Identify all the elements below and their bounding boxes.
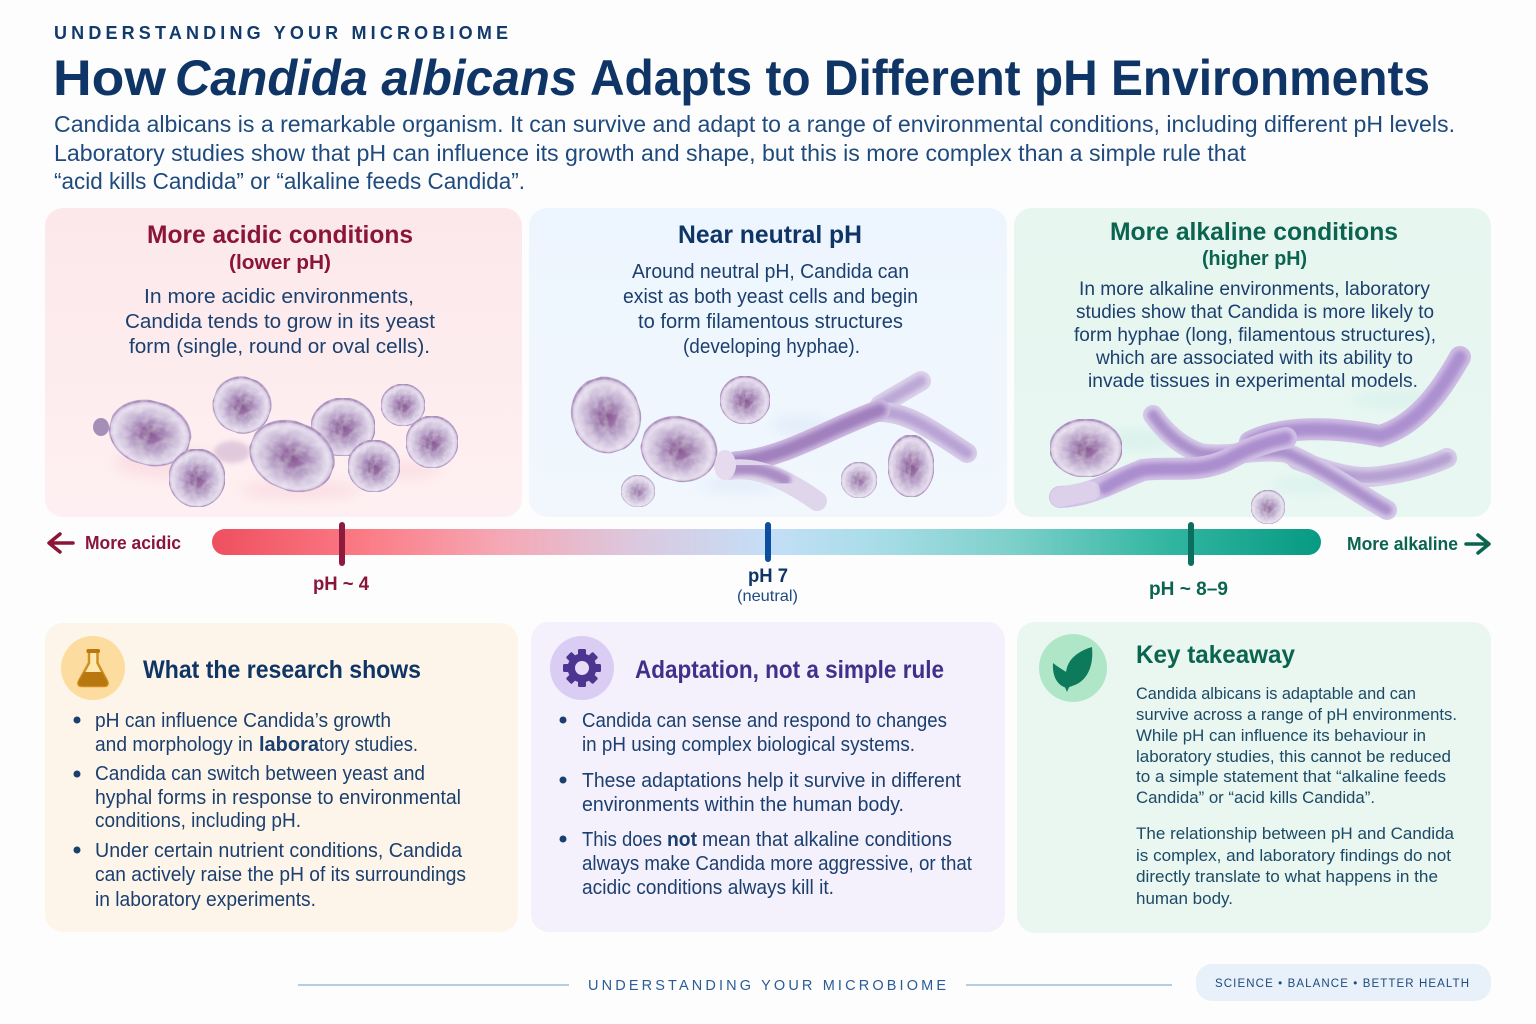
tick: pH 8-9 (1188, 522, 1194, 566)
bullet list: in laboratory experiments. (95, 889, 316, 911)
takeaway paragraphs: directly translate to what happens in the (1136, 867, 1438, 886)
panel background (531, 622, 1005, 932)
bullet list: and morphology in (95, 734, 253, 756)
bullet list: labora (259, 734, 320, 756)
panel subheading: (lower pH) (229, 252, 331, 274)
bullet list: always make Candida more aggressive, or that (582, 853, 972, 875)
panel background (45, 623, 518, 932)
arrow: more alkaline (1466, 535, 1489, 553)
title: How (53, 50, 166, 106)
heading: What the research shows (143, 656, 421, 684)
heading: Adaptation, not a simple rule (635, 656, 944, 684)
gradient bar (212, 529, 1321, 555)
panel body text: (developing hyphae). (683, 336, 860, 358)
label: neutral: (neutral) (737, 588, 798, 605)
illustration: yeast cells (93, 369, 458, 507)
label: pH 7: pH 7 (748, 566, 788, 587)
panel body text: Around neutral pH, Candida can (632, 261, 909, 283)
panel background (1014, 208, 1491, 517)
panel body text: In more acidic environments, (144, 286, 414, 308)
takeaway paragraphs: While pH can influence its behaviour in (1136, 726, 1426, 745)
panel: key takeaway (1017, 622, 1491, 933)
footer (298, 964, 1491, 1001)
takeaway paragraphs (1136, 684, 1457, 908)
label: more alkaline: More alkaline (1347, 534, 1458, 554)
intro paragraph: Candida albicans is a remarkable organism. It can survive and adapt to a range of environmental conditions, including different pH levels. (54, 111, 1455, 137)
icon: flask (61, 636, 125, 700)
intro paragraph: “acid kills Candida” or “alkaline feeds Candida”. (54, 168, 525, 194)
illustration: hyphae (1050, 357, 1460, 524)
panel heading: Near neutral pH (678, 221, 862, 249)
panel background (1017, 622, 1491, 933)
panel body text: studies show that Candida is more likely to (1076, 301, 1434, 323)
bullet list: Candida can switch between yeast and (95, 763, 425, 785)
label: more acidic: More acidic (85, 533, 181, 553)
bullet list: Candida can sense and respond to changes (582, 710, 947, 732)
eyebrow: UNDERSTANDING YOUR MICROBIOME (54, 23, 508, 43)
panel body text: to form filamentous structures (638, 311, 903, 333)
illustration: yeast cells and developing hyphae (562, 368, 967, 507)
panel heading: More acidic conditions (147, 221, 413, 249)
bullet list (560, 710, 972, 899)
takeaway paragraphs: Candida” or “acid kills Candida”. (1136, 788, 1375, 807)
takeaway paragraphs: survive across a range of pH environments. (1136, 705, 1457, 724)
bullet list: conditions, including pH. (95, 810, 301, 832)
label: pH 8-9: pH ~ 8–9 (1149, 579, 1228, 600)
panel heading: More alkaline conditions (1110, 218, 1398, 246)
panel: adaptation, not a simple rule (531, 622, 1005, 932)
bullet list: environments within the human body. (582, 794, 904, 816)
pH scale (49, 522, 1489, 605)
bullet list: can actively raise the pH of its surroundings (95, 864, 466, 886)
footer label: UNDERSTANDING YOUR MICROBIOME (588, 978, 946, 994)
title: Adapts to Different pH Environments (590, 50, 1430, 106)
panel body text (125, 286, 435, 358)
takeaway paragraphs: to a simple statement that “alkaline feeds (1136, 767, 1446, 786)
takeaway paragraphs: Candida albicans is adaptable and can (1136, 684, 1416, 703)
panel body text: form hyphae (long, filamentous structures), (1074, 324, 1436, 346)
takeaway paragraphs: human body. (1136, 889, 1233, 908)
title: Candida albicans (175, 50, 577, 106)
takeaway paragraphs: is complex, and laboratory findings do not (1136, 846, 1451, 865)
panel: near neutral pH (529, 208, 1007, 517)
panel: more alkaline conditions (1014, 208, 1491, 524)
panel body text: Candida tends to grow in its yeast (125, 311, 435, 333)
bullet list: not (667, 829, 697, 851)
footer pill (1196, 964, 1491, 1001)
heading: Key takeaway (1136, 641, 1295, 669)
panel body text: invade tissues in experimental models. (1088, 370, 1418, 392)
icon: leaf (1039, 634, 1107, 702)
bullet list: mean that alkaline conditions (702, 829, 952, 851)
tick: pH 4 (339, 522, 345, 566)
panel body text: In more alkaline environments, laboratory (1079, 278, 1430, 300)
icon: gear (550, 636, 614, 700)
bullet list: Under certain nutrient conditions, Candida (95, 840, 463, 862)
takeaway paragraphs: The relationship between pH and Candida (1136, 824, 1455, 843)
panel background (529, 208, 1007, 517)
panel body text: exist as both yeast cells and begin (623, 286, 918, 308)
bullet list: pH can influence Candida’s growth (95, 710, 391, 732)
bullet list: acidic conditions always kill it. (582, 877, 834, 899)
bullet list: tory studies. (319, 734, 418, 756)
bullet list: in pH using complex biological systems. (582, 734, 915, 756)
label: pH 4: pH ~ 4 (313, 574, 369, 595)
panel body text (623, 261, 918, 358)
panel body text: which are associated with its ability to (1095, 347, 1413, 369)
tick: pH 7 (765, 522, 771, 562)
panel: more acidic conditions (45, 208, 522, 517)
footer pill: SCIENCE • BALANCE • BETTER HEALTH (1215, 978, 1469, 990)
bullet list: hyphal forms in response to environmental (95, 787, 461, 809)
panel body text: form (single, round or oval cells). (129, 336, 430, 358)
header (53, 23, 1455, 194)
panel: what the research shows (45, 623, 518, 932)
bullet list (74, 710, 466, 911)
bullet list: This does (582, 829, 662, 851)
takeaway paragraphs: laboratory studies, this cannot be reduced (1136, 747, 1451, 766)
intro paragraph (54, 111, 1455, 194)
panel background (45, 208, 522, 517)
panel subheading: (higher pH) (1202, 248, 1307, 270)
arrow: more acidic (49, 534, 73, 552)
bullet list: These adaptations help it survive in different (582, 770, 961, 792)
intro paragraph: Laboratory studies show that pH can influence its growth and shape, but this is more complex than a simple rule that (54, 140, 1247, 166)
panel body text (1074, 278, 1436, 392)
